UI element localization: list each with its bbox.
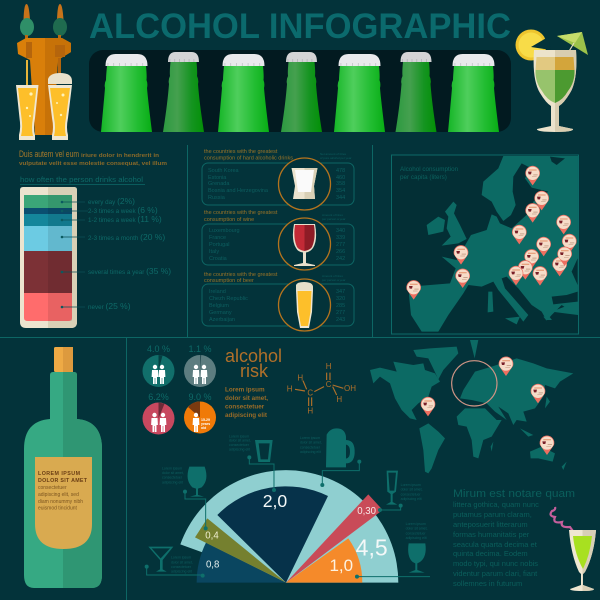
icon: ethanol molecule: H: [326, 362, 332, 371]
pie 4: old: [201, 426, 206, 430]
text block: mirum: seacula quarta decima et: [453, 540, 538, 549]
panel: beer: consumption of beer: [204, 278, 254, 284]
panel: hard alcoholic drinks: Bosnia and Herzegovina: [208, 188, 269, 194]
icon: green bottle: [24, 347, 102, 588]
icon: ethanol molecule: H: [336, 395, 342, 404]
bottle 4: [281, 52, 322, 132]
panel: wine: Croatia: [209, 256, 228, 262]
bottle 3: [218, 54, 269, 132]
text: gauge notes: adipiscing elit: [401, 497, 422, 501]
text: gauge notes: consectetuer: [401, 492, 421, 496]
panel: beer: 277: [336, 310, 345, 316]
chart: layered glass: [20, 187, 77, 328]
panel: hard alcoholic drinks: 354: [336, 188, 345, 194]
text: gauge notes: consectetuer: [171, 565, 192, 569]
segment: 0,30: [286, 494, 383, 583]
pie 2: [184, 355, 216, 387]
text: gauge notes: adipiscing elit: [229, 447, 250, 451]
segment: 0,4: [195, 518, 286, 583]
panel: wine: Amount of litres: [322, 213, 343, 217]
text block: mirum: Mirum est notare quam: [453, 488, 575, 500]
text: gauge notes: Lorem ipsum: [406, 522, 426, 526]
bottle 2: [163, 52, 204, 132]
text: gauge notes: Lorem ipsum: [162, 466, 182, 470]
panel: hard alcoholic drinks: South Korea: [208, 168, 240, 174]
map pins: europe: [406, 166, 577, 300]
segment: 0,8: [197, 543, 286, 583]
text: gauge notes: dolor sit amet,: [229, 439, 251, 443]
text: gauge notes: consectetuer: [406, 531, 426, 535]
text: gauge notes: Lorem ipsum: [401, 483, 421, 487]
section divider lines: [0, 145, 600, 600]
text: gauge notes: consectetuer: [229, 443, 250, 447]
chart labels: frequency: several times a year (35 %): [88, 266, 171, 276]
panel: beer: [202, 272, 354, 331]
chart: population pies: 1.1 %: [188, 344, 212, 354]
chart labels: frequency: every day (2%): [88, 196, 135, 206]
panel: beer: 320: [336, 296, 345, 302]
panel: hard alcoholic drinks: Estonia: [208, 175, 227, 181]
chart: population pies: 6.2%: [148, 392, 169, 402]
segment: 0,4: 0,4: [205, 530, 219, 541]
text block: mirum: sollemnes in futurum: [453, 579, 522, 588]
map: world: [370, 340, 573, 473]
text: gauge notes: consectetuer: [162, 476, 183, 480]
heading: alcohol risk: alcohol: [225, 346, 282, 366]
bottle 6: [396, 52, 436, 132]
panel: wine: France: [209, 235, 226, 241]
text block: intro: Duis autem vel eum: [19, 149, 79, 160]
text: gauge notes: Lorem ipsum: [229, 434, 249, 438]
panel: hard alcoholic drinks: the countries with the greatest: [204, 149, 278, 155]
text: gauge notes: dolor sit amet,: [171, 560, 193, 564]
panel: wine: 266: [336, 249, 345, 255]
label: 4,5: 4,5: [356, 534, 388, 560]
panel: beer: 243: [336, 317, 345, 323]
text block: mirum: formas humanitatis per: [453, 530, 530, 539]
text block: risk: Lorem ipsum: [225, 386, 265, 394]
text: gauge notes: dolor sit amet,: [406, 527, 428, 531]
panel: hard alcoholic drinks: 478: [336, 168, 345, 174]
text: gauge notes: adipiscing elit: [406, 536, 427, 540]
text block: mirum: putamus parum claram,: [453, 510, 532, 519]
segment: 1,0: 1,0: [329, 556, 353, 575]
text block: mirum: videntur parum clari, fiant: [453, 569, 538, 578]
panel: hard alcoholic drinks: Grenada: [208, 181, 230, 187]
text: gauge notes: adipiscing elit: [300, 450, 321, 454]
chart: population pies: 9.0 %: [188, 392, 212, 402]
panel: hard alcoholic drinks: 344: [336, 195, 345, 201]
map pins: world: [421, 356, 554, 455]
bottle label: adipiscing elit, sed: [38, 492, 79, 498]
bottle label: DOLOR SIT AMET: [38, 478, 88, 484]
map: europe: [409, 156, 578, 332]
icon: shot outline: [255, 440, 273, 462]
text: map caption: [400, 166, 459, 181]
icon: right wine glass: [408, 543, 426, 573]
panel: beer: Ireland: [209, 289, 226, 295]
icon: wine glass: [278, 218, 330, 270]
panel: hard alcoholic drinks: of pure alcohol per year: [320, 156, 352, 160]
icon: beer mug: [326, 428, 355, 467]
panel: wine: Luxembourg: [209, 228, 240, 234]
panel: beer: 347: [336, 289, 345, 295]
text: gauge notes: consectetuer: [300, 445, 321, 449]
segment: 1,0: [286, 538, 362, 583]
icon: wine goblet: [188, 467, 206, 497]
pie 4: 15-29: [201, 418, 210, 422]
pie 1: [142, 355, 174, 387]
text: gauge notes: adipiscing elit: [162, 480, 183, 484]
text block: mirum: modo typi, qui nunc nobis: [453, 559, 538, 568]
panel: beer: Germany: [209, 310, 232, 316]
text: gauge notes: Lorem ipsum: [171, 556, 191, 560]
text: gauge notes: adipiscing elit: [171, 570, 192, 574]
icon: green cocktail: [551, 507, 596, 591]
icon: ethanol molecule: H: [297, 373, 303, 382]
panel: hard alcoholic drinks: Net amount of litres: [320, 152, 347, 156]
text block: mirum: anteposuerit litterarum: [453, 520, 528, 529]
text block: risk: [225, 386, 268, 419]
panel: wine: 340: [336, 228, 345, 234]
panel: beer: Amount of litres: [322, 274, 343, 278]
text block: risk: adipiscing elit: [225, 412, 268, 419]
icon: ethanol molecule: H: [307, 406, 313, 415]
panel: wine: 277: [336, 242, 345, 248]
icon: cocktail glass: [516, 30, 588, 132]
panel: beer: Belgium: [209, 303, 229, 309]
panel: wine: Portugal: [209, 242, 230, 248]
heading: how often: how often the person drinks alcohol: [20, 175, 143, 184]
bottle label: euismod tincidunt: [38, 506, 78, 512]
icon: beer glass: [278, 279, 330, 331]
panel: beer: per person a year: [322, 278, 346, 282]
icon: ethanol molecule: C: [326, 380, 332, 389]
title: ALCOHOL INFOGRAPHIC: [89, 7, 511, 46]
text block: intro: vulputate velit esse molestie consequat, vel illum: [19, 161, 167, 167]
chart labels: frequency: 2-3 times a week (6 %): [88, 205, 158, 215]
bottle label: consectetuer: [38, 485, 67, 491]
segment: 0,30: 0,30: [357, 506, 376, 517]
icon: shot glass: [278, 158, 330, 210]
text block: intro: [19, 149, 167, 167]
icon: ethanol molecule: C: [307, 389, 313, 398]
pie 3: [142, 402, 174, 434]
chart labels: frequency: never (25 %): [88, 301, 131, 311]
text block: risk: dolor sit amet,: [225, 395, 268, 402]
panel: hard alcoholic drinks: [202, 149, 354, 210]
panel: beer: the countries with the greatest: [204, 272, 278, 278]
panel: beer: 285: [336, 303, 345, 309]
text block: risk: consectetuer: [225, 404, 265, 410]
chart labels: frequency: 1-2 times a week (11 %): [88, 214, 162, 224]
bottle 7: [448, 54, 499, 132]
icon: ethanol molecule: [287, 362, 356, 415]
panel: wine: per person a year: [322, 217, 346, 221]
icon: beer tap with two beers: [16, 4, 72, 140]
bottle 5: [334, 54, 385, 132]
text: gauge notes: [162, 434, 428, 574]
bottle label: LOREM IPSUM: [38, 471, 81, 477]
panel: hard alcoholic drinks: consumption of hard alcoholic drinks: [204, 156, 293, 162]
bottle label: diam nonummy nibh: [38, 499, 83, 505]
bottle label: [35, 457, 92, 549]
panel: beer: Chezh Republic: [209, 296, 248, 302]
connectors: [147, 457, 430, 577]
panel: wine: the countries with the greatest: [204, 210, 278, 216]
pie 4: [184, 402, 216, 434]
panel: wine: [202, 210, 354, 270]
text block: mirum: quinta decima. Eodem: [453, 549, 528, 558]
text: map caption: per capita (liters): [400, 174, 447, 181]
chart labels: frequency: [61, 196, 171, 311]
panel: wine: 242: [336, 256, 345, 262]
icon: ethanol molecule: OH: [344, 384, 356, 393]
segment: 2,0: 2,0: [263, 491, 287, 511]
panel: wine: Italy: [209, 249, 219, 255]
chart: risk gauge: [145, 428, 430, 583]
text block: mirum: [453, 488, 575, 588]
heading: alcohol risk: risk: [240, 361, 269, 381]
icon: champagne flute: [386, 471, 398, 505]
text: gauge notes: dolor sit amet,: [162, 471, 184, 475]
gauge: base sector: [180, 470, 398, 583]
heading: alcohol risk: [225, 346, 282, 381]
text: gauge notes: dolor sit amet,: [300, 441, 322, 445]
pie 4: years: [201, 422, 210, 426]
bottle 1: [101, 54, 152, 132]
panel: hard alcoholic drinks: Russia: [208, 195, 226, 201]
panel: europe map: [392, 155, 578, 334]
panel: hard alcoholic drinks: 358: [336, 181, 345, 187]
panel: hard alcoholic drinks: 460: [336, 175, 345, 181]
segment: 2,0: [217, 486, 328, 583]
icon: martini: [148, 547, 173, 572]
chart labels: frequency: 2-3 times a month (20 %): [88, 232, 165, 242]
chart: population pies: 4.0 %: [147, 344, 170, 354]
chart: population pies: [142, 344, 216, 434]
text block: intro: iriure dolor in hendrerit in: [81, 153, 160, 159]
text: gauge notes: dolor sit amet,: [401, 488, 423, 492]
icon: ethanol molecule: H: [287, 385, 293, 394]
panel: beer: Azerbaijan: [209, 317, 235, 323]
segment: 0,8: 0,8: [206, 560, 219, 571]
panel: wine: 339: [336, 235, 345, 241]
text: gauge notes: Lorem ipsum: [300, 436, 320, 440]
panel: wine: consumption of wine: [204, 217, 254, 223]
text: map caption: Alcohol consumption: [400, 166, 459, 173]
panel: bottle tops: [89, 50, 511, 132]
text block: mirum: littera gothica, quam nunc: [453, 500, 539, 509]
